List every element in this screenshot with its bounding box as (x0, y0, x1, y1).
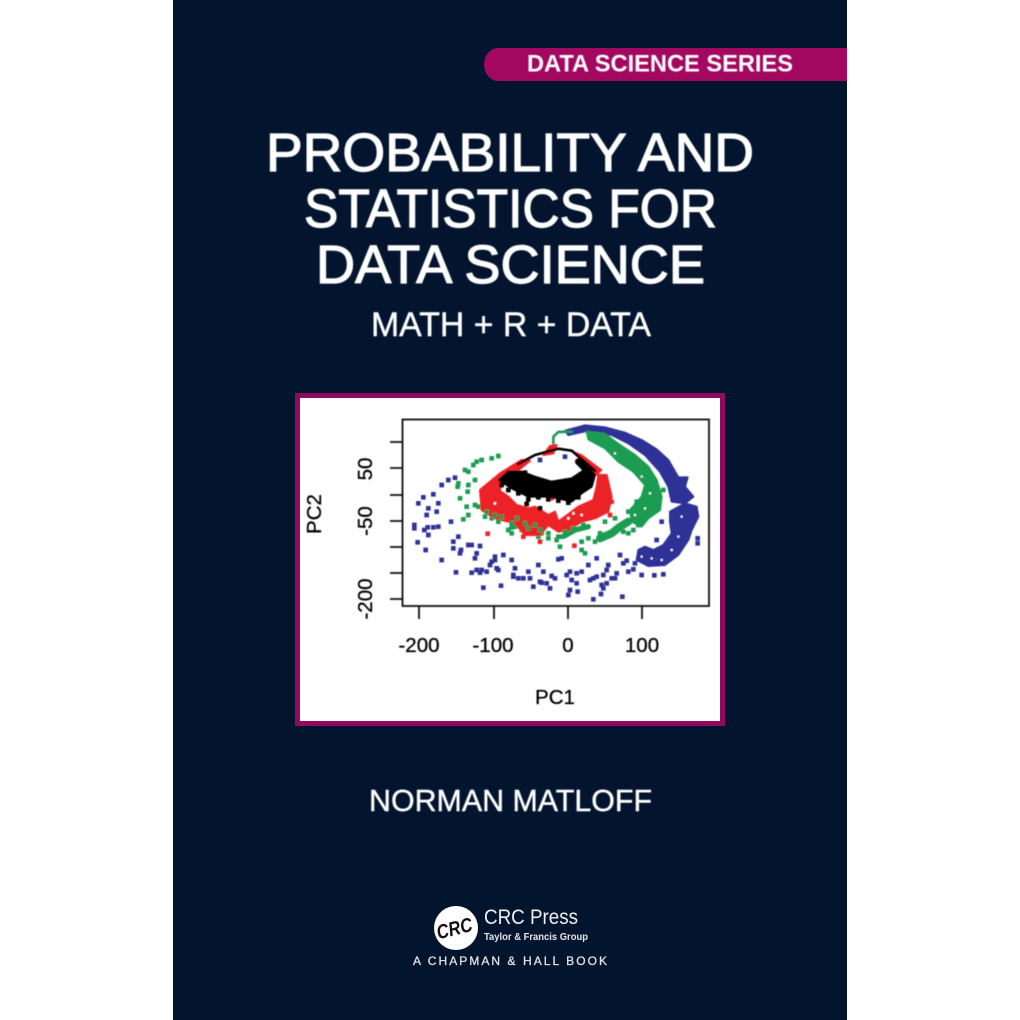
book cover panel (173, 0, 847, 1020)
scatter plot (303, 420, 709, 709)
author: NORMAN MATLOFF (369, 783, 652, 818)
series banner (484, 48, 847, 81)
y axis labels: PC2 (303, 494, 326, 534)
x axis labels: -100 (472, 634, 514, 657)
plot axes (390, 420, 709, 619)
gaps in red body (495, 490, 582, 518)
publisher logo (413, 906, 607, 968)
lower left green overlay (487, 512, 583, 537)
publisher group: Taylor & Francis Group (484, 931, 588, 943)
title: STATISTICS FOR (304, 179, 717, 239)
red points (480, 445, 612, 546)
y axis labels: -50 (354, 506, 377, 536)
x axis labels: PC1 (535, 686, 575, 709)
title: PROBABILITY AND (266, 123, 754, 183)
gaps in blue cluster (642, 517, 682, 560)
framed chart panel (298, 396, 722, 724)
subtitle: MATH + R + DATA (371, 306, 651, 344)
icon: CRC circle: CRC (434, 914, 475, 944)
title (266, 123, 754, 295)
black points (499, 449, 595, 508)
x axis labels (398, 634, 659, 709)
x axis labels: -200 (398, 634, 440, 657)
gaps in green band (615, 453, 650, 515)
green points (458, 432, 663, 553)
y axis labels: 50 (354, 458, 377, 480)
y axis labels (303, 458, 377, 620)
y axis labels: -200 (354, 578, 377, 620)
blue points (414, 425, 698, 599)
imprint line: A CHAPMAN & HALL BOOK (413, 954, 607, 968)
x axis labels: 0 (562, 634, 574, 657)
x axis labels: 100 (625, 634, 659, 657)
series banner: DATA SCIENCE SERIES (527, 50, 793, 78)
publisher name: CRC Press (484, 906, 578, 929)
title: DATA SCIENCE (316, 235, 705, 295)
icon: CRC circle (434, 906, 478, 950)
scatter points (414, 425, 698, 599)
